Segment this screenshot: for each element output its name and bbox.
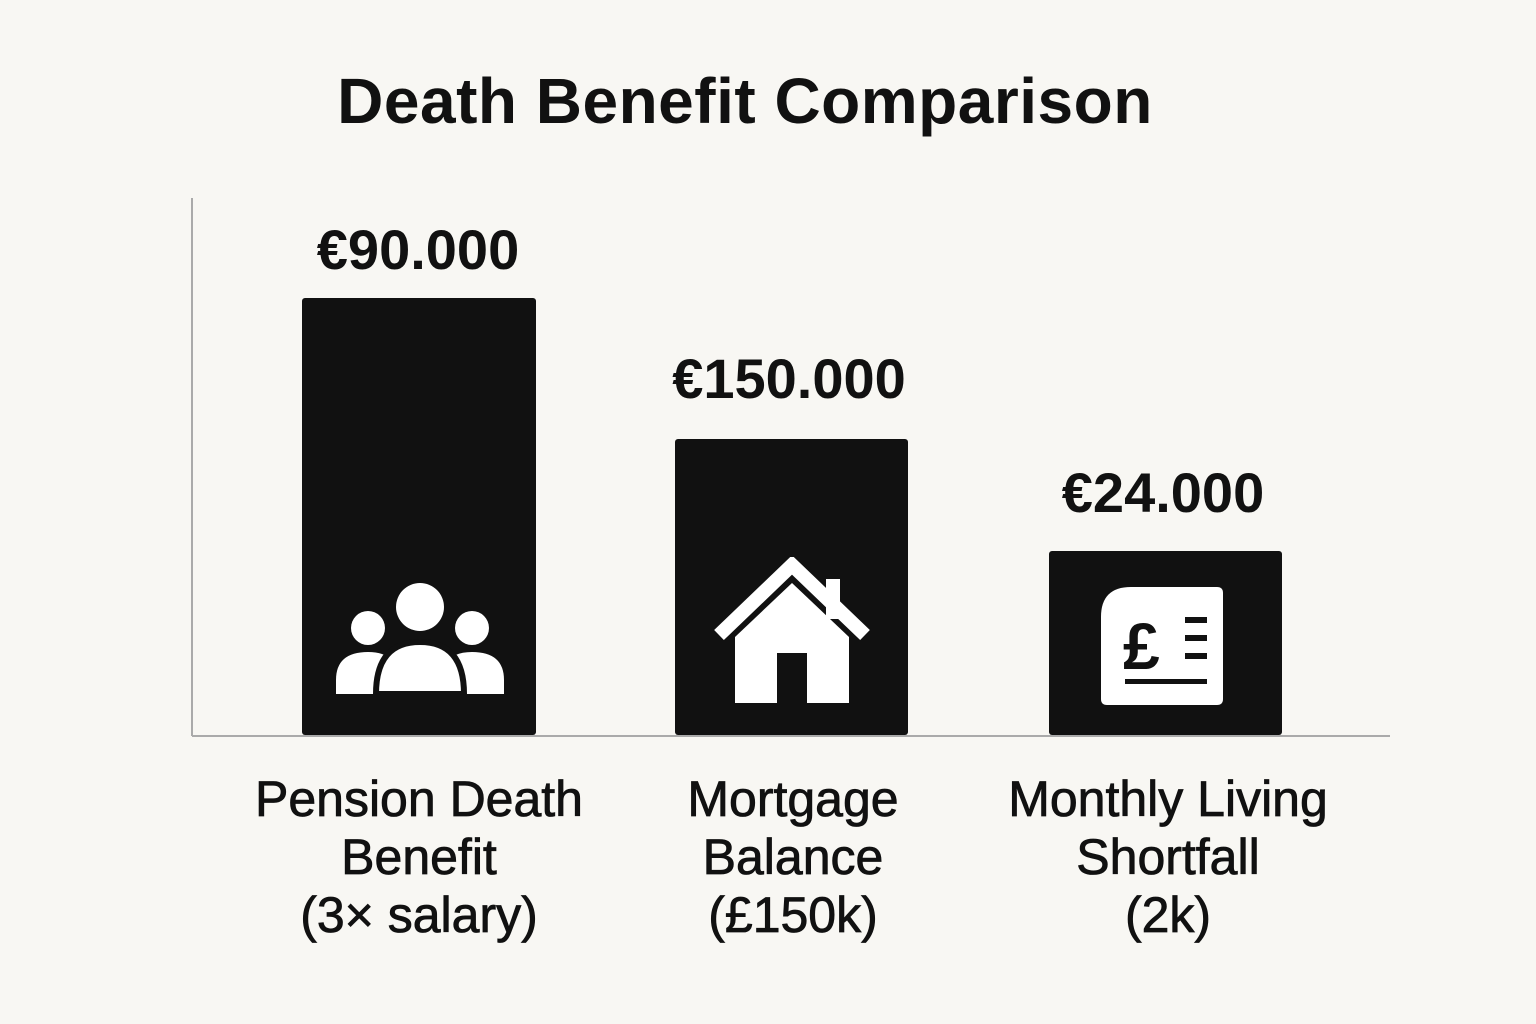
- value label: pension: €90.000: [317, 218, 519, 281]
- title: Death Benefit Comparison: [337, 65, 1153, 137]
- category label: pension: Benefit: [341, 829, 497, 885]
- icon: people: [336, 583, 504, 694]
- value label: mortgage: €150.000: [672, 347, 906, 410]
- category label: pension: Pension Death: [255, 771, 583, 827]
- category label: pension: [255, 771, 583, 943]
- category label: shortfall: Shortfall: [1076, 829, 1260, 885]
- category label: pension: (3× salary): [300, 887, 538, 943]
- icon: pound document: £: [1123, 609, 1160, 683]
- icon: house: [714, 557, 870, 703]
- category label: shortfall: (2k): [1125, 887, 1211, 943]
- category label: shortfall: Monthly Living: [1008, 771, 1328, 827]
- icon: pound document: [1101, 587, 1223, 705]
- bar: mortgage balance: [675, 439, 908, 735]
- category label: mortgage: [687, 771, 899, 943]
- category label: mortgage: (£150k): [708, 887, 878, 943]
- category label: mortgage: Balance: [703, 829, 883, 885]
- value label: shortfall: €24.000: [1062, 461, 1264, 524]
- bar: monthly living shortfall: [1049, 551, 1282, 735]
- category label: shortfall: [1008, 771, 1328, 943]
- category label: mortgage: Mortgage: [687, 771, 899, 827]
- bar: pension death benefit: [302, 298, 536, 735]
